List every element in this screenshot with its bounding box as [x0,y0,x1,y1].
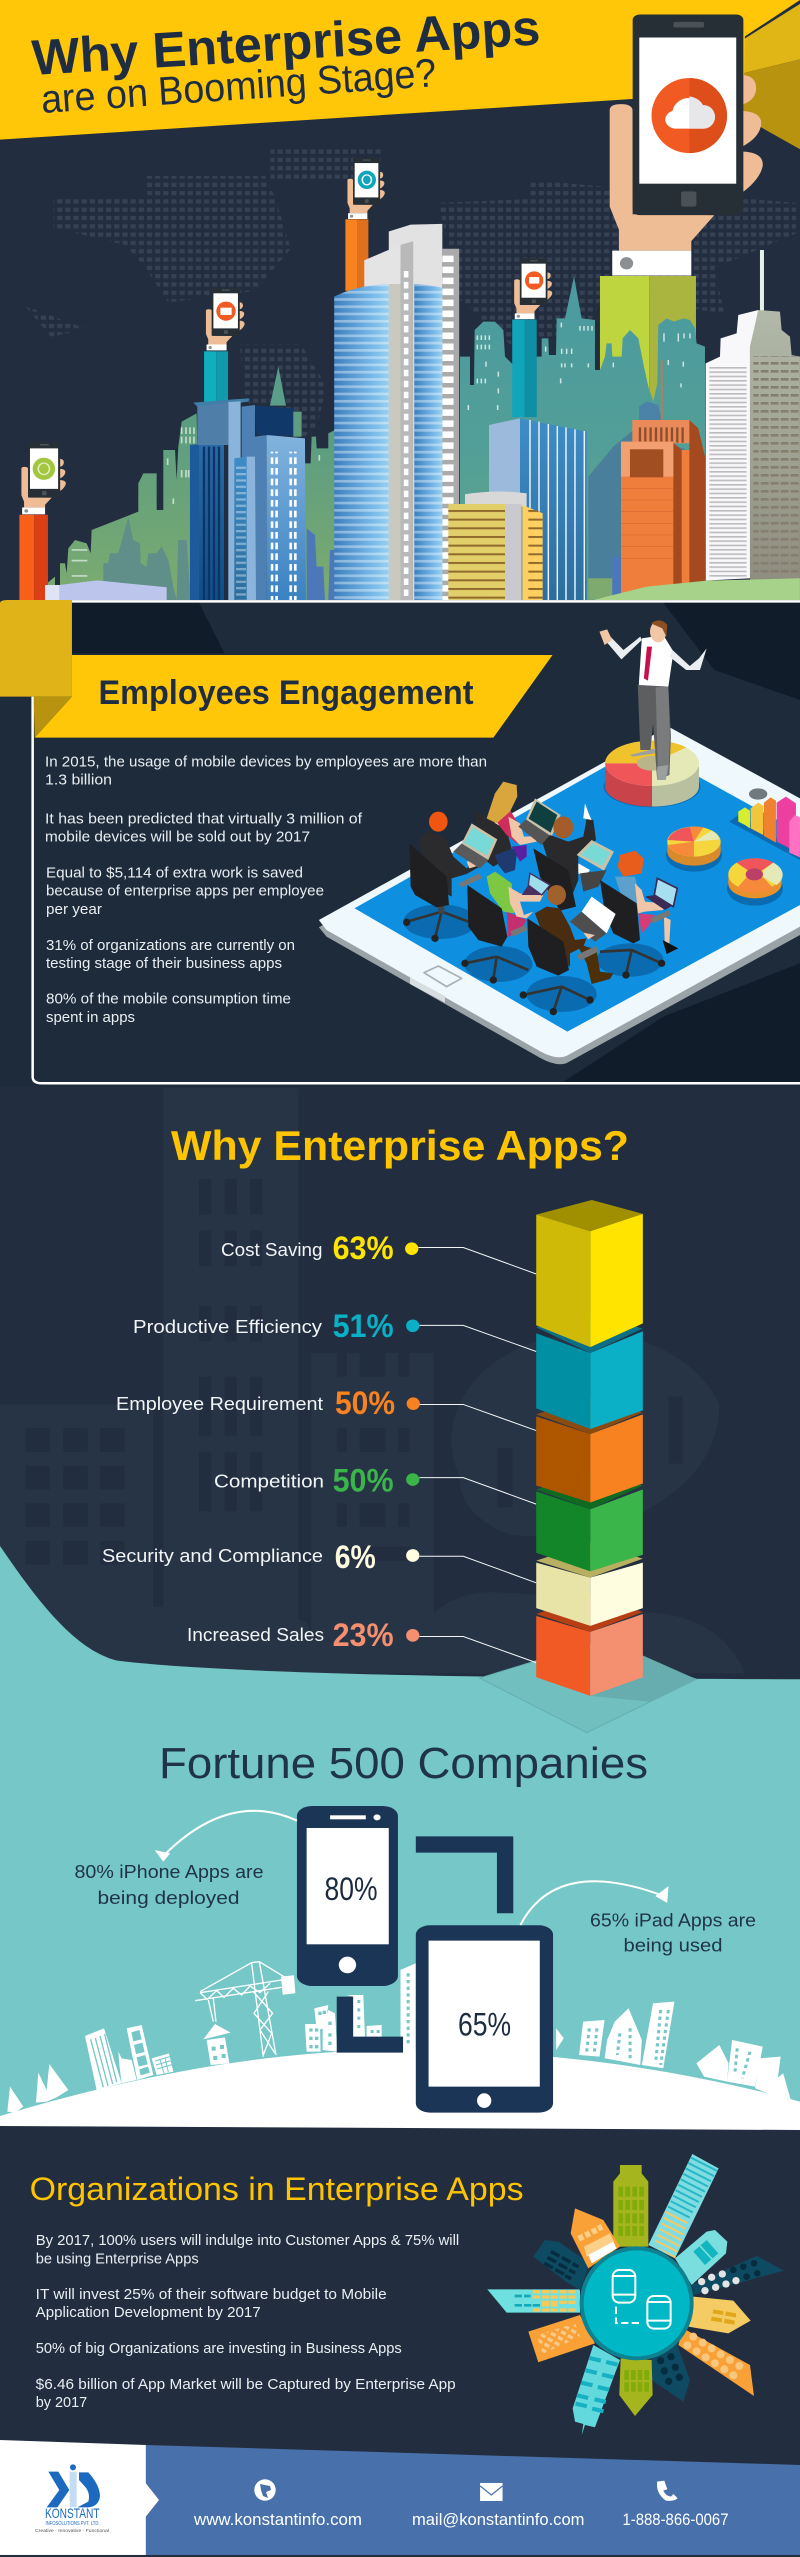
callout: iphone apps: 80% iPhone Apps are [74,1861,264,1882]
house under crane [203,2024,231,2065]
small hand: mail app left [204,288,245,402]
row: productive efficiency: 51% [333,1308,394,1344]
connector bracket bottom [337,1997,403,2053]
text block: organization statistics: 50% of big Organizations are investing in Business Apps [36,2340,402,2357]
text block: employee statistics [45,754,487,1026]
leader lines [418,1247,536,1663]
radial building: dark lower [650,2343,690,2402]
radial building: orange top left [571,2208,620,2268]
right blue glass building [489,418,587,600]
heading: why enterprise apps: Why Enterprise Apps? [171,1122,629,1169]
ribbon fold shadow [34,697,72,738]
navy background [0,2126,800,2473]
row: productive efficiency: Productive Efficiency [133,1316,323,1337]
row: employee requirement: Employee Requirement [116,1393,323,1414]
back skyline left [45,413,335,600]
panel background facets [0,600,800,1087]
employee in green top [461,848,550,984]
row: increased sales: 23% [333,1617,394,1653]
heading: organizations in enterprise apps: Organizations in Enterprise Apps [30,2171,524,2207]
orange tower [588,360,705,600]
iphone percentage: 80% [324,1871,378,1907]
callout: ipad apps: 65% iPad Apps are [590,1910,756,1931]
text block: employee statistics: In 2015, the usage of mobile devices by employees are more than [45,754,487,771]
back skyline right [460,277,705,600]
green hill [593,578,800,600]
bottom edge [0,2555,800,2557]
tablet details and team [403,782,800,1015]
arrow: iphone callout [157,1811,297,1860]
radial city illustration [487,2154,784,2435]
teal background [0,1690,800,2130]
text block: employee statistics: mobile devices will be sold out by 2017 [45,829,310,846]
heading: fortune 500 companies: Fortune 500 Companies [159,1739,648,1788]
text block: organization statistics: $6.46 billion of App Market will be Captured by Enterprise App [36,2376,456,2393]
logo mark [47,2464,100,2507]
stack shadow [590,1656,696,1702]
big hand sleeve [600,276,696,409]
pedestal pie chart [604,741,701,807]
arrow: ipad callout [520,1881,667,1925]
icon: telephone [657,2481,678,2501]
radial building: light cyan [675,2230,727,2285]
row: competition: Competition [214,1470,324,1492]
text block: employee statistics: 1.3 billion [45,772,112,789]
tablet percentage: 65% [458,2007,511,2043]
footer white logo panel [0,2440,159,2555]
teal wave [0,1546,800,1733]
text block: organization statistics: By 2017, 100% users will indulge into Customer Apps & 75% will [36,2232,459,2249]
callout: ipad apps: being used [624,1935,722,1956]
row: employee requirement: 50% [335,1385,395,1421]
text block: employee statistics: It has been predicted that virtually 3 million of [45,811,363,828]
logo text: KONSTANT [45,2505,100,2521]
white transition band [0,2120,800,2130]
text block: employee statistics: per year [46,901,102,918]
iphone device [297,1806,398,1986]
radial building: cyan left [487,2289,580,2313]
row: competition [214,1462,394,1498]
small hand: network app [345,158,385,291]
radial building: orange low left [528,2315,595,2362]
contact: phone: 1-888-866-0067 [622,2510,728,2529]
heading ribbon [35,655,553,738]
legend dots [405,1242,420,1642]
icon: globe [254,2479,276,2501]
text block: employee statistics: 80% of the mobile consumption time [46,991,291,1008]
text block: organization statistics [36,2232,459,2411]
row: cost saving [221,1230,394,1266]
subtitle: are on Booming Stage? [40,51,438,122]
callout: ipad apps [590,1910,756,1956]
white frame [33,601,800,1083]
bar chart [729,797,800,860]
callout: iphone apps: being deployed [98,1887,240,1908]
row: productive efficiency [133,1308,394,1344]
row: increased sales: Increased Sales [187,1624,324,1645]
title: Why Enterprise Apps [30,0,542,86]
text block: employee statistics: because of enterprise apps per employee [46,883,324,900]
radial building: green lower [619,2358,653,2416]
faded background buildings [0,1088,745,1673]
tablet device [416,1925,553,2113]
big hand holding phone with cloud app [610,15,763,276]
heading: employees engagement: Employees Engagement [98,674,474,712]
employee at back desk [473,782,561,867]
panel: employees engagement [0,600,800,1087]
employee with orange hair [403,812,497,942]
employee in brown suit [520,885,616,1015]
center circle [582,2248,692,2358]
icon: envelope [480,2483,503,2501]
employee with raised hand [533,803,614,911]
hillside houses right [401,1963,791,2100]
employee with red hair [597,851,678,979]
text block: organization statistics: Application Development by 2017 [36,2304,261,2321]
logo text [35,2505,109,2533]
small hand: mail app right [512,258,552,417]
contact: website: www.konstantinfo.com [193,2510,362,2529]
yellow banner [0,0,800,140]
center buildings [305,1995,382,2052]
logo text: Creative · Innovative · Functional [35,2528,109,2533]
stack base diamond [480,1644,696,1733]
connected phones icon [613,2270,671,2329]
text block: organization statistics: by 2017 [36,2394,87,2411]
row: competition: 50% [333,1462,394,1498]
radial building: dark upper left [533,2240,590,2290]
radial building: green top [613,2165,648,2247]
row: security and compliance: Security and Compliance [102,1545,323,1566]
panel: fortune 500 companies [0,1690,800,2130]
construction crane [195,1962,295,2057]
panel: organizations in enterprise apps [0,2120,800,2557]
row: security and compliance [102,1539,376,1575]
central blue and white tower [334,224,459,600]
text block: employee statistics: testing stage of their business apps [46,955,282,972]
world map dots [26,147,796,452]
row: employee requirement [116,1385,395,1421]
radial building: orange dotted [678,2328,754,2396]
radial building: dark dotted [692,2256,784,2295]
row: cost saving: Cost Saving [221,1239,322,1260]
trees [7,2064,68,2113]
donut chart [727,858,783,906]
pale low building [45,581,167,600]
tablet home button [424,966,462,987]
text block: employee statistics: Equal to $5,114 of extra work is saved [46,865,303,882]
connector bracket top [416,1836,513,1913]
row: security and compliance: 6% [335,1539,376,1575]
footer contact bar [146,2445,800,2555]
tablet side connector [410,977,445,1003]
yellow striped building [448,492,543,600]
logo text: INFOSOLUTIONS PVT. LTD. [46,2521,100,2527]
radial building: cyan striped [648,2154,719,2258]
header panel: city skyline with hands holding phones [0,0,800,600]
hillside city left with crane [7,1962,382,2113]
white city hill [0,2050,800,2130]
heading ribbon fold tab [0,600,72,697]
row: increased sales [187,1617,394,1653]
3d stacked column [536,1200,643,1696]
white skyscraper [706,250,800,581]
row: cost saving: 63% [333,1230,394,1266]
small hand: alarm app [19,442,66,600]
text block: employee statistics: 31% of organizations are currently on [46,937,295,954]
banner fold dark [742,59,800,149]
small pie chart [666,827,722,872]
green spire [270,367,286,406]
radial building: yellow [688,2297,751,2333]
panel: why enterprise apps [0,1088,800,1733]
banner fold light [742,4,800,73]
text block: employee statistics: spent in apps [46,1009,135,1026]
tablet body [319,727,800,1064]
presenter [599,620,707,780]
text block: organization statistics: IT will invest 25% of their software budget to Mobile [36,2286,387,2303]
left buildings [85,2025,173,2090]
callout: iphone apps [74,1861,264,1908]
text block: organization statistics: be using Enterprise Apps [36,2250,199,2267]
blue office cluster [45,367,335,600]
radial building: cyan lower [573,2345,620,2435]
contact: email: mail@konstantinfo.com [412,2510,584,2529]
